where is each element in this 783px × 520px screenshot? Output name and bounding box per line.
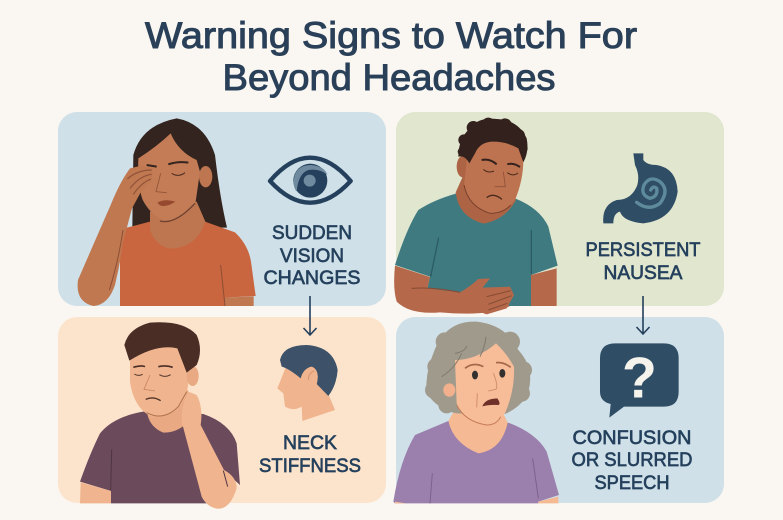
panel: confusion or slurred speech xyxy=(393,317,724,503)
label: sudden vision changes: SUDDEN xyxy=(272,222,352,244)
label: confusion or slurred speech xyxy=(572,427,692,494)
label: confusion or slurred speech: OR SLURRED xyxy=(572,449,692,471)
label: neck stiffness xyxy=(259,432,361,477)
icon: eye xyxy=(270,158,351,203)
illustration: woman holding her eye xyxy=(78,118,256,306)
title: Beyond Headaches xyxy=(222,57,556,98)
icon: question speech bubble xyxy=(600,343,679,418)
illustration: man holding his neck xyxy=(80,322,240,509)
label: sudden vision changes: VISION xyxy=(280,245,344,267)
illustration: man holding his stomach xyxy=(394,118,558,314)
label: neck stiffness: STIFFNESS xyxy=(259,455,361,477)
label: neck stiffness: NECK xyxy=(283,432,337,454)
panel: persistent nausea xyxy=(394,112,724,314)
label: confusion or slurred speech: CONFUSION xyxy=(572,427,692,449)
arrow: nausea to confusion xyxy=(636,296,650,334)
panel: neck stiffness xyxy=(58,317,386,509)
label: sudden vision changes: CHANGES xyxy=(264,267,360,289)
label: confusion or slurred speech: SPEECH xyxy=(594,472,670,494)
title xyxy=(145,15,637,98)
arrow: vision to neck xyxy=(304,296,316,335)
title: Warning Signs to Watch For xyxy=(145,15,637,56)
icon: stomach xyxy=(603,153,678,223)
label: sudden vision changes xyxy=(264,222,360,289)
label: persistent nausea xyxy=(586,239,701,284)
illustration: older woman looking confused xyxy=(393,322,559,503)
label: persistent nausea: NAUSEA xyxy=(604,262,682,284)
panel: sudden vision changes xyxy=(58,112,386,306)
label: persistent nausea: PERSISTENT xyxy=(586,239,701,261)
icon: head in profile xyxy=(277,345,338,421)
icon: question speech bubble: ? xyxy=(622,346,657,410)
